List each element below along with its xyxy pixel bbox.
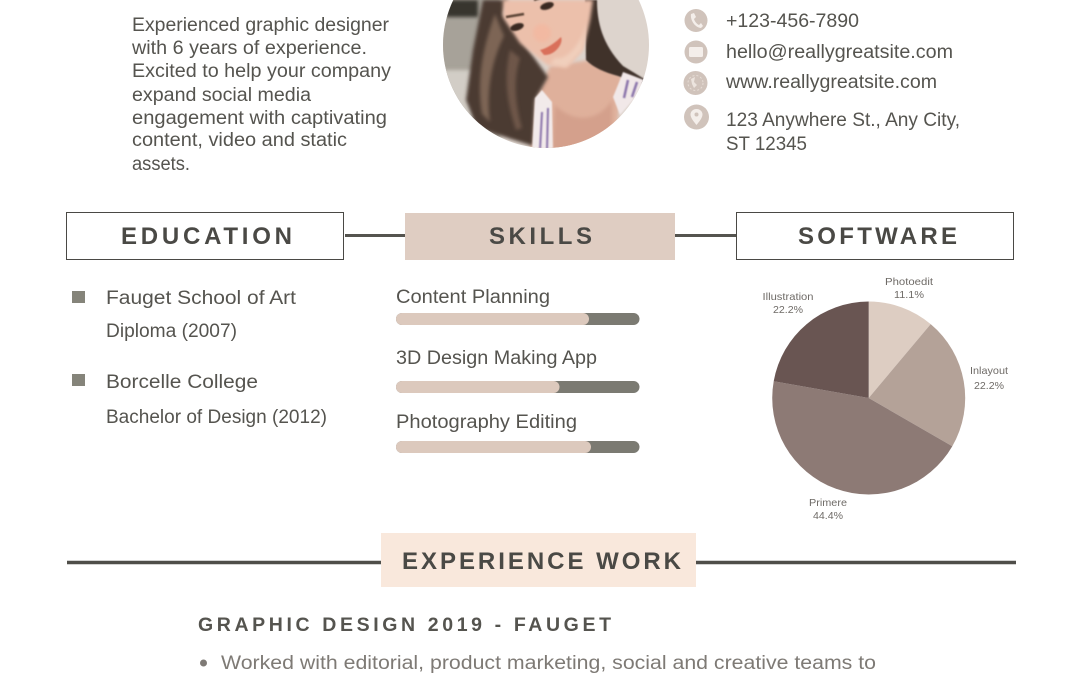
- contact text: 123 Anywhere St., Any City,: [726, 110, 960, 131]
- photo background: [440, 0, 652, 150]
- hair back right: [585, 0, 646, 84]
- profile summary text: [131, 15, 392, 175]
- pie labels: [762, 276, 1008, 522]
- slice: Primere: [772, 381, 952, 495]
- heading: education: EDUCATION: [121, 223, 292, 250]
- heading: skills: [405, 213, 675, 260]
- pie labels: 22.2%: [773, 304, 803, 316]
- chest: [530, 60, 622, 150]
- profile summary text: Experienced graphic designer: [132, 15, 390, 36]
- skill: photography: [396, 412, 640, 453]
- skill: photography: Photography Editing: [396, 412, 577, 433]
- profile summary text: content, video and static: [132, 130, 347, 151]
- pie labels: 22.2%: [974, 380, 1004, 392]
- pie labels: Primere: [809, 497, 847, 509]
- icon: email: [684, 40, 708, 64]
- pie labels: Photoedit: [885, 276, 933, 288]
- lips: [540, 37, 562, 55]
- pie chart: software: [762, 276, 1008, 522]
- contact text: ST 12345: [726, 134, 807, 155]
- education entry: Fauget: [72, 288, 297, 342]
- job title: GRAPHIC DESIGN 2019 - FAUGET: [198, 614, 611, 636]
- job description bullet: Worked with editorial, product marketing, social and creative teams to: [221, 653, 876, 674]
- connector lines: [345, 234, 737, 237]
- education entry: Borcelle: Bachelor of Design (2012): [106, 407, 327, 428]
- pie labels: 11.1%: [894, 289, 924, 301]
- education entry: Fauget: Diploma (2007): [106, 321, 237, 342]
- profile summary text: Excited to help your company: [132, 61, 392, 82]
- profile photo: [440, 0, 652, 150]
- skill: content planning: Content Planning: [396, 287, 550, 308]
- contact text: hello@reallygreatsite.com: [726, 42, 953, 63]
- education list: [72, 288, 327, 428]
- slice: Inlayout: [869, 324, 965, 446]
- eyes: [509, 22, 525, 32]
- long hair left: [466, 0, 548, 146]
- skill: content planning: [396, 287, 640, 325]
- slice: Illustration: [774, 302, 869, 398]
- icon: location pin: [684, 104, 709, 130]
- icon: phone: [684, 9, 708, 32]
- heading: skills: SKILLS: [489, 223, 592, 250]
- pie labels: Illustration: [762, 291, 814, 303]
- pie labels: 44.4%: [813, 510, 843, 522]
- profile summary text: assets.: [132, 154, 190, 175]
- contact text: [725, 11, 960, 155]
- skill: 3D design: 3D Design Making App: [396, 348, 597, 369]
- icon: globe: [684, 71, 708, 95]
- profile summary text: with 6 years of experience.: [131, 38, 367, 59]
- heading: education: [66, 212, 344, 260]
- pie labels: Inlayout: [970, 365, 1008, 377]
- skill: 3D design: [396, 348, 640, 393]
- profile summary text: expand social media: [132, 85, 311, 106]
- heading: software: [736, 212, 1014, 260]
- contact details: [684, 9, 960, 155]
- shirt right: [613, 72, 644, 115]
- heading: software: SOFTWARE: [798, 223, 957, 250]
- education entry: Borcelle: Borcelle College: [106, 372, 258, 393]
- heading: experience work: [381, 533, 696, 587]
- skills bars: [396, 287, 640, 453]
- experience divider line: [67, 561, 1016, 564]
- education entry: Fauget: Fauget School of Art: [106, 288, 297, 309]
- education entry: Borcelle: [72, 372, 327, 428]
- profile summary text: engagement with captivating: [132, 108, 387, 129]
- slice: Photoedit: [869, 302, 931, 398]
- heading: experience work: EXPERIENCE WORK: [402, 548, 682, 575]
- face: [503, 0, 593, 68]
- shirt left: [532, 90, 553, 150]
- contact text: +123-456-7890: [726, 11, 859, 32]
- contact text: www.reallygreatsite.com: [725, 72, 937, 93]
